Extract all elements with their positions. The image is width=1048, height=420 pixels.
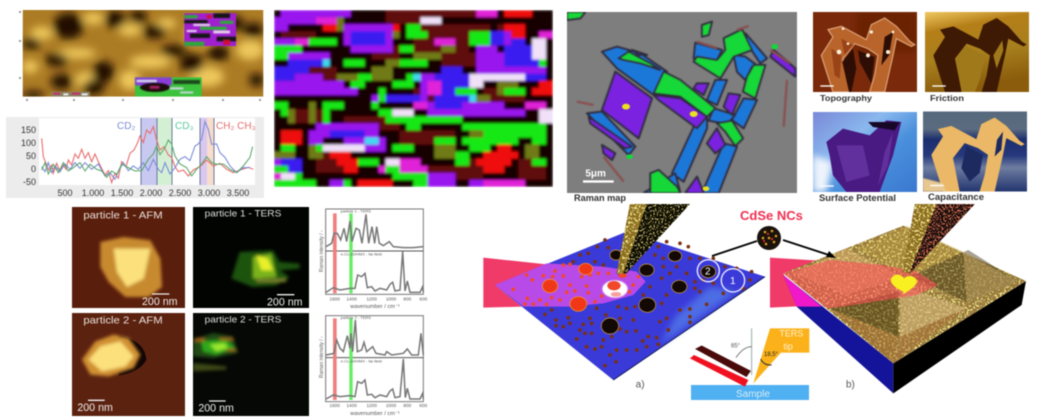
label a): a) <box>636 379 645 390</box>
panel: particle 2 AFM: particle 2 - AFM <box>83 316 163 327</box>
panel: particle 1 AFM: 200 nm <box>142 296 178 308</box>
icon: nanocrystal <box>757 226 781 250</box>
scale bar: 5μm <box>585 169 606 180</box>
panel: particle 1 TERS <box>193 207 309 308</box>
panel: Topography <box>813 12 917 103</box>
flake domains: blue <box>587 33 767 193</box>
inset map: thin strip <box>52 92 90 97</box>
y-axis labels: 0 <box>31 164 36 174</box>
label: CdSe NCs with nanocrystal icon and arrows <box>712 208 836 258</box>
panel: particle 2 AFM: 200 nm <box>77 402 113 414</box>
x-axis labels: 2.000 <box>140 188 162 198</box>
panel: particle 1 AFM <box>72 207 185 308</box>
inset map: lower centre <box>135 77 202 97</box>
dark nano-disks <box>601 250 716 334</box>
sample bar: Sample <box>736 389 770 400</box>
chart: Raman spectra line chart with CD2, CD3, CH2 CH3 bands <box>6 117 264 198</box>
band labels: CD₂ <box>117 121 135 132</box>
diagram b: TERS on gold pyramid substrate <box>770 204 1026 393</box>
highlighted bands <box>141 118 214 185</box>
inset map: upper right <box>184 13 236 46</box>
flake domains: purple <box>589 50 795 193</box>
x-axis labels <box>57 188 249 198</box>
x-axis labels: 500 <box>57 188 73 198</box>
panel: particle 1 TERS: particle 1 - TERS <box>205 208 281 218</box>
numbered rings <box>697 260 745 292</box>
chart: particle 1 Raman spectra <box>326 208 428 310</box>
x-axis labels: 2.500 <box>169 188 191 198</box>
axis labels: 1200 <box>366 403 377 408</box>
pyramid facets <box>793 226 1018 363</box>
panel: AFM gold height map with inset maps <box>22 9 264 98</box>
y-axis labels: 50 <box>26 151 36 161</box>
legend text <box>341 208 382 257</box>
band labels: CH₂ CH₃ <box>216 121 256 132</box>
axis labels: 600 <box>419 403 428 408</box>
legend text <box>341 315 382 363</box>
legend text: n-CL-20/HMX - far-field <box>341 252 382 257</box>
x-axis labels: 1.500 <box>111 188 133 198</box>
arrow to diagram a <box>712 241 757 256</box>
legend text: n-CL-20/HMX - far-field <box>341 358 382 363</box>
axis labels: 1000 <box>386 403 397 408</box>
TERS tip callout: TERS <box>779 329 803 339</box>
diagram a: TERS on blue substrate with CdSe nanocrystals <box>483 204 765 390</box>
panel: particle 1 TERS: 200 nm <box>267 296 303 308</box>
numbered rings: 2 <box>705 266 711 277</box>
panel: particle 2 TERS: particle 2 - TERS <box>205 314 281 324</box>
caption: Raman map: Raman map <box>574 193 626 203</box>
y-axis label: particle 2: Raman intensity / - <box>319 336 325 378</box>
left side face <box>783 275 893 393</box>
axis labels: 1600 <box>329 296 340 301</box>
axis labels: 1400 <box>346 403 357 408</box>
panel: Surface Potential <box>813 112 917 203</box>
x-axis labels: 3.000 <box>198 188 220 198</box>
spectrum traces <box>326 320 423 399</box>
red nano-disks in laser <box>542 263 593 311</box>
arrow to diagram b <box>783 240 836 258</box>
panel: particle 2 AFM <box>72 313 185 416</box>
AFM tip <box>617 204 690 278</box>
panel: Friction <box>925 12 1029 103</box>
chart: particle 2 Raman spectra <box>326 315 428 417</box>
spectra traces <box>42 122 253 183</box>
substrate <box>495 232 765 380</box>
TERS tip callout: 18,5° <box>764 352 779 358</box>
gold top surface <box>783 226 1026 363</box>
y-axis labels: -50 <box>23 177 36 187</box>
axis labels: 800 <box>403 403 412 408</box>
panel: Friction: Friction <box>930 93 964 103</box>
label: CdSe NCs with nanocrystal icon and arrows: CdSe NCs <box>740 208 803 223</box>
panel: RGB pixel mosaic map <box>273 9 554 188</box>
axis labels: 600 <box>419 296 428 301</box>
TERS tip callout: tip <box>783 342 793 352</box>
axis labels: 1200 <box>366 296 377 301</box>
y-axis label: particle 1: Raman intensity / - <box>319 230 325 272</box>
nanoparticles on substrate <box>545 240 752 366</box>
panel: particle 1 AFM: particle 1 - AFM <box>83 210 163 221</box>
cantilever: 65° <box>731 344 741 350</box>
spectral bands <box>333 213 353 293</box>
laser spot on substrate <box>495 263 646 307</box>
panel: Surface Potential: Surface Potential <box>819 193 896 203</box>
axis labels: wavenumber / cm⁻¹ <box>349 304 400 310</box>
x-axis labels: 3.500 <box>227 188 249 198</box>
axis labels <box>329 296 428 310</box>
axis labels <box>329 403 428 417</box>
panel: Capacitance <box>923 112 1027 202</box>
hot spot <box>602 280 628 298</box>
panel: particle 2 TERS: 200 nm <box>198 403 234 415</box>
AFM tip <box>903 204 975 273</box>
laser beam <box>483 258 547 308</box>
hot spot <box>891 275 917 294</box>
AFM axis ticks <box>19 11 261 101</box>
panel: Capacitance: Capacitance <box>928 192 984 202</box>
y-axis labels: 150 <box>21 125 36 135</box>
laser beam <box>770 258 825 308</box>
band labels <box>117 121 256 132</box>
nanoparticles on laser area <box>513 264 638 304</box>
flake domains: green <box>567 12 765 193</box>
legend text: particle 2 - TERS <box>341 315 371 320</box>
panel: particle 2 TERS <box>193 313 309 416</box>
right side face <box>893 281 1026 393</box>
axis labels: 1000 <box>386 296 397 301</box>
y-axis labels: 100 <box>21 138 36 148</box>
yellow dots <box>577 26 790 191</box>
axis labels: 1600 <box>329 403 340 408</box>
band labels: CD₃ <box>175 121 194 132</box>
TERS tip callout <box>753 328 809 383</box>
label b): b) <box>846 379 855 390</box>
panel: Topography: Topography <box>820 93 872 103</box>
laser spot <box>783 260 938 308</box>
panel: Raman map <box>567 12 797 203</box>
axis labels: 1400 <box>346 296 357 301</box>
axis labels: 800 <box>403 296 412 301</box>
x-axis labels: 1.000 <box>82 188 104 198</box>
spectrum traces <box>326 214 423 292</box>
schematic: tip angle geometry <box>690 328 809 400</box>
y-axis labels <box>21 125 36 187</box>
spectral bands <box>333 318 353 400</box>
axis labels: wavenumber / cm⁻¹ <box>349 411 400 417</box>
numbered rings: 1 <box>730 276 736 287</box>
scale bar <box>583 169 614 183</box>
legend text: particle 1 - TERS <box>341 208 371 213</box>
